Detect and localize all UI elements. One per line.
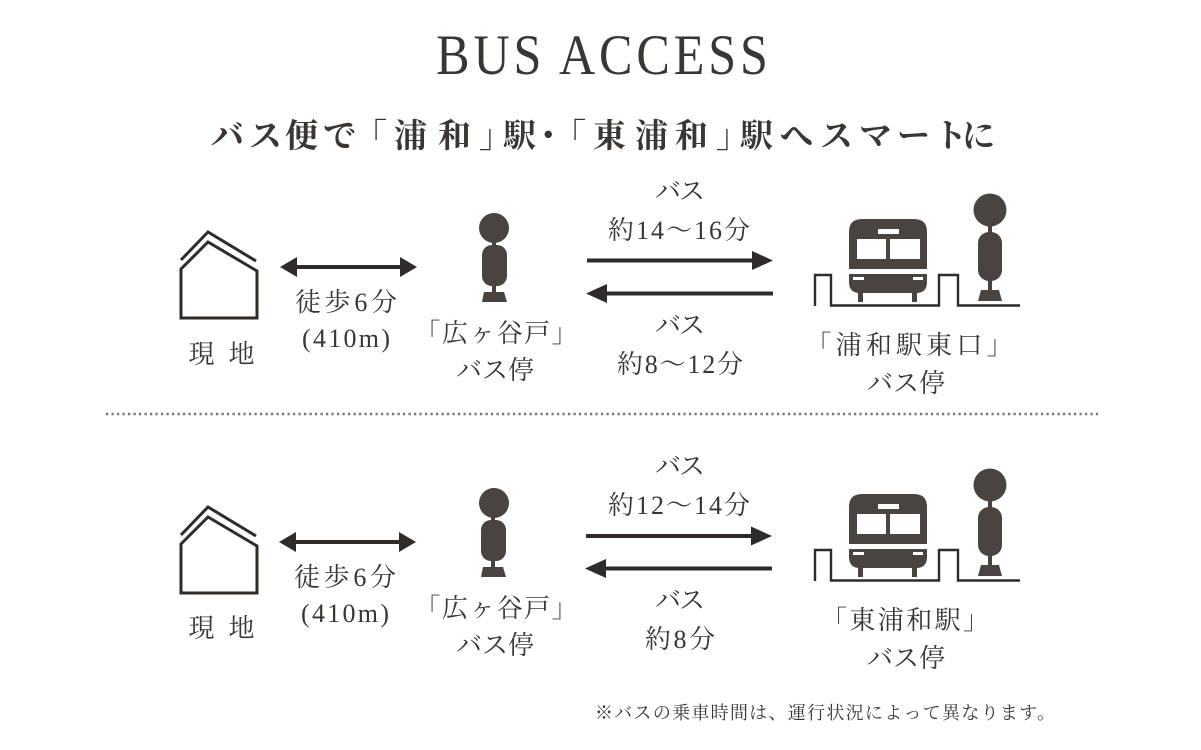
label: Urawa station east exit bus stop: バス停 — [867, 369, 945, 398]
label: Urawa station east exit bus stop: 「浦和駅東口」 — [806, 331, 1012, 360]
label: Hirogayato bus stop — [414, 594, 578, 660]
label: bus outbound time: バス — [655, 177, 705, 206]
label: walk time: 徒歩6分 — [295, 288, 397, 317]
arrow: return — [586, 284, 773, 303]
subtitle: バス便で「浦和」駅･「東浦和」駅へスマートに — [211, 118, 995, 155]
route 2 — [181, 452, 1020, 673]
label: bus return time: バス — [655, 586, 705, 615]
label: Higashi-Urawa station bus stop: 「東浦和駅」 — [821, 606, 989, 635]
label: Hirogayato bus stop — [414, 319, 578, 385]
label: bus return time: 約8～12分 — [617, 350, 743, 379]
icon: house — [181, 232, 257, 318]
label: bus return time: 約8分 — [645, 625, 715, 654]
label: current location: 現 地 — [188, 614, 254, 643]
label: walk time: (410m) — [302, 324, 390, 353]
label: bus return time — [645, 586, 715, 654]
label: Higashi-Urawa station bus stop: バス停 — [867, 644, 945, 673]
label: Hirogayato bus stop: バス停 — [456, 631, 534, 660]
label: Hirogayato bus stop: 「広ヶ谷戸」 — [414, 594, 578, 623]
label: walk time: 徒歩6分 — [294, 563, 396, 592]
route 1 — [181, 177, 1020, 398]
arrow: outbound — [587, 251, 773, 270]
icon: bus stop — [479, 488, 509, 577]
icon: bus and platform — [815, 494, 1020, 581]
footnote: ※バスの乗車時間は、運行状況によって異なります。 — [595, 703, 1055, 723]
label: Hirogayato bus stop: バス停 — [456, 356, 534, 385]
arrow: walk — [280, 257, 417, 277]
label: bus return time: バス — [655, 311, 705, 340]
label: walk time — [295, 288, 397, 353]
arrow: walk — [279, 532, 416, 552]
label: Higashi-Urawa station bus stop — [821, 606, 989, 673]
icon: house — [181, 507, 257, 593]
icon: station bus stop — [974, 194, 1006, 301]
label: bus return time — [617, 311, 743, 379]
label: bus outbound time — [608, 452, 750, 520]
label: Urawa station east exit bus stop — [806, 331, 1012, 398]
label: bus outbound time: 約12～14分 — [608, 491, 750, 520]
icon: bus stop — [479, 213, 509, 302]
arrow: outbound — [586, 526, 772, 546]
label: bus outbound time — [608, 177, 750, 245]
label: bus outbound time: 約14～16分 — [608, 216, 750, 245]
label: Hirogayato bus stop: 「広ヶ谷戸」 — [414, 319, 578, 348]
arrow: return — [585, 559, 772, 578]
label: current location: 現 地 — [188, 340, 254, 369]
label: walk time: (410m) — [301, 599, 389, 628]
title: BUS ACCESS — [436, 23, 768, 87]
label: bus outbound time: バス — [655, 452, 705, 481]
icon: station bus stop — [974, 468, 1006, 576]
dotted divider — [106, 413, 1098, 415]
icon: bus and platform — [815, 219, 1020, 306]
label: walk time — [294, 563, 396, 628]
